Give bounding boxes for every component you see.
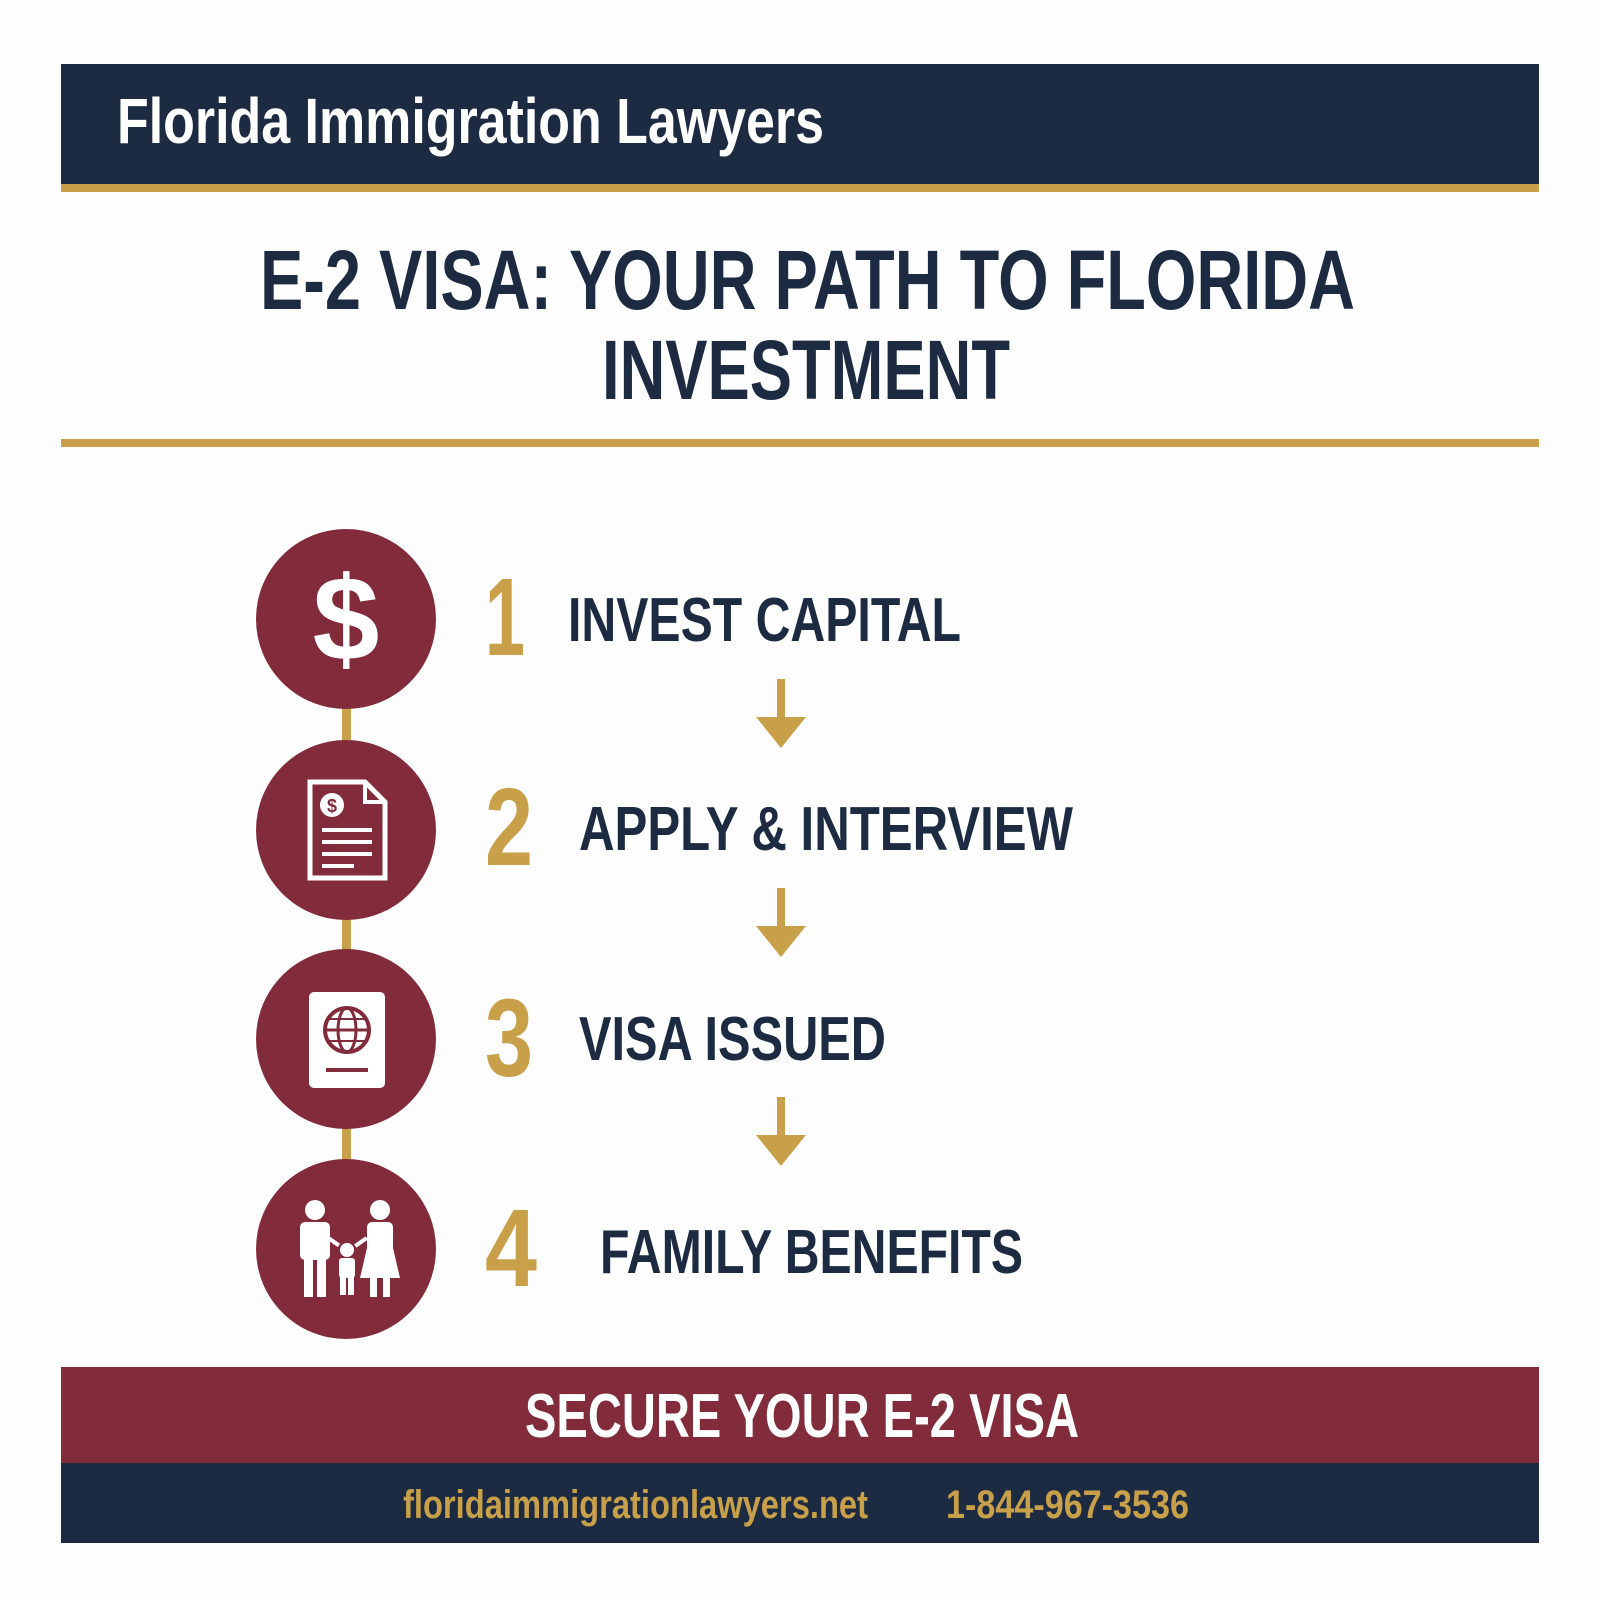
icon: document: $ [327, 796, 337, 816]
arrow 3 [756, 1097, 806, 1166]
step 3: VISA ISSUED [579, 1005, 886, 1074]
step 2: 2 [485, 766, 533, 889]
call to action band [61, 1367, 1539, 1463]
step 3: 3 [485, 977, 533, 1100]
step 3 [256, 949, 886, 1129]
title: INVESTMENT [602, 323, 1010, 417]
icon: document [256, 740, 436, 920]
header bar [61, 64, 1539, 192]
title [260, 233, 1355, 417]
arrow 1 [756, 679, 806, 748]
step 2: APPLY & INTERVIEW [579, 795, 1073, 864]
call to action band: SECURE YOUR E-2 VISA [525, 1382, 1079, 1451]
arrow 2 [756, 888, 806, 957]
header text: Florida Immigration Lawyers [117, 85, 824, 157]
icon: family [256, 1159, 436, 1339]
step 4: FAMILY BENEFITS [600, 1218, 1023, 1287]
connector line [342, 700, 351, 1180]
footer contact: 1-844-967-3536 [946, 1483, 1189, 1527]
icon: dollar [256, 529, 436, 709]
icon: passport [256, 949, 436, 1129]
step 2 [256, 740, 1073, 920]
footer contact: floridaimmigrationlawyers.net [403, 1483, 868, 1527]
step 4: 4 [485, 1187, 537, 1310]
step 4 [256, 1159, 1023, 1339]
step 1: INVEST CAPITAL [568, 586, 961, 655]
step 1: 1 [485, 556, 525, 679]
icon: dollar: $ [313, 552, 379, 686]
step 1 [256, 529, 961, 709]
footer contact [61, 1463, 1539, 1543]
